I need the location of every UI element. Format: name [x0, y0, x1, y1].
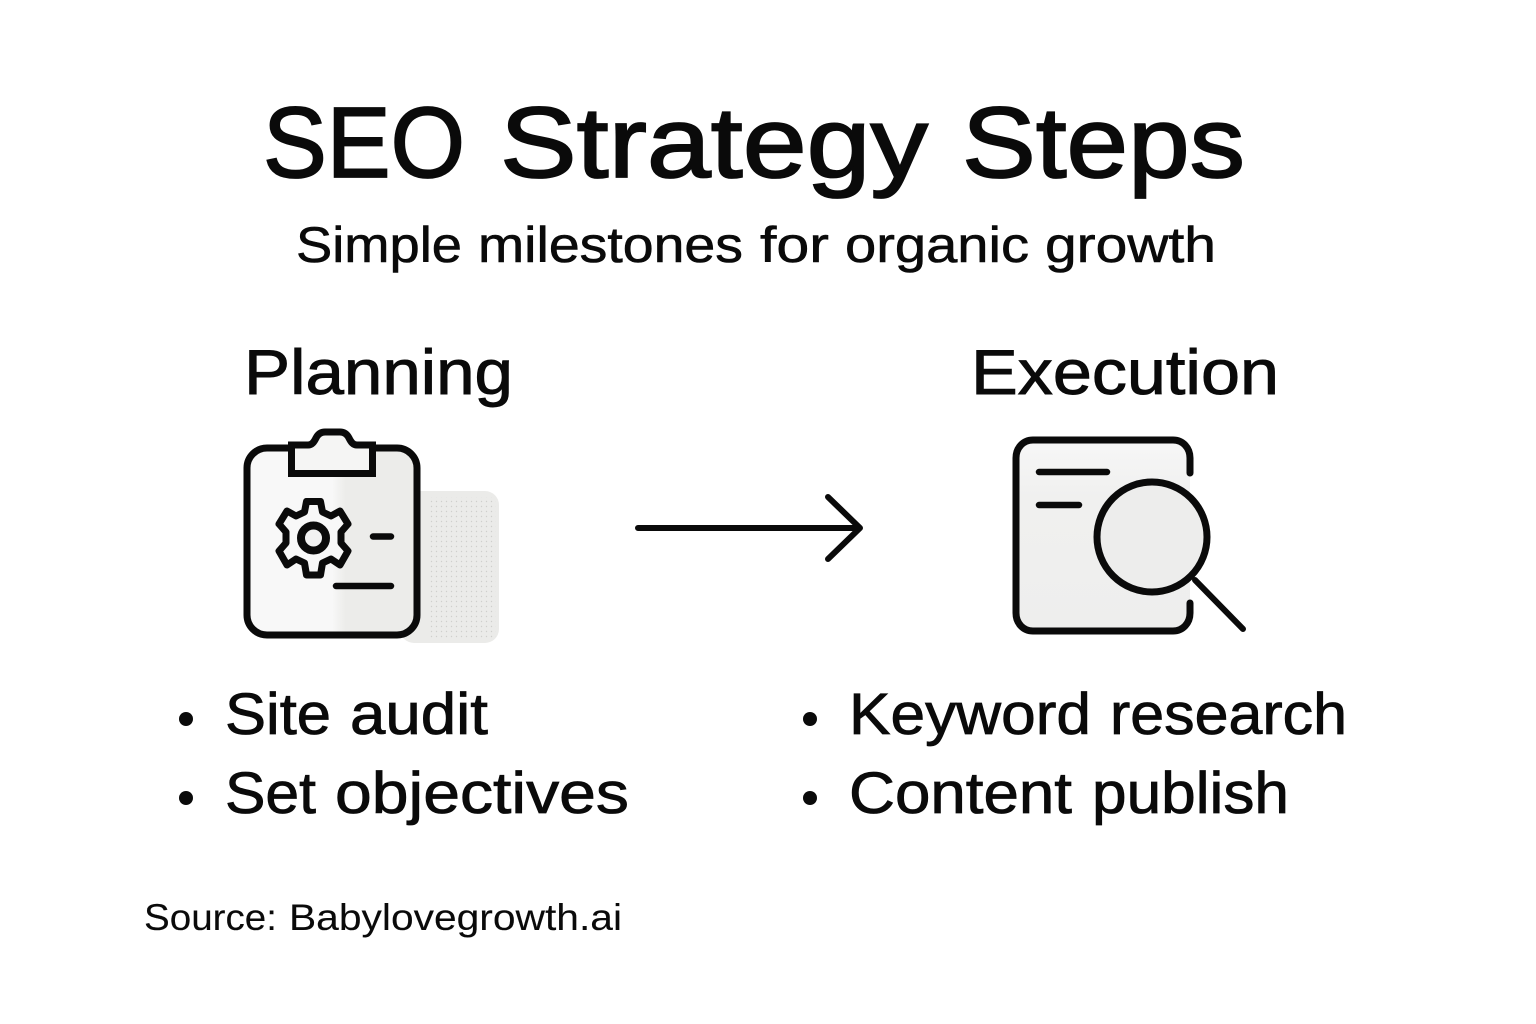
planning bullet list: Set: [225, 761, 316, 826]
title: Steps: [962, 87, 1245, 199]
subtitle: for: [760, 217, 829, 273]
execution heading: Execution: [971, 338, 1279, 408]
planning bullet list: objectives: [335, 761, 629, 826]
planning bullet list: audit: [350, 682, 488, 747]
panel: planning: [179, 338, 629, 826]
icon: clipboard with gear: [247, 432, 499, 643]
subtitle: milestones: [478, 217, 743, 273]
execution bullet list: Keyword: [849, 682, 1091, 747]
planning bullet list: Site: [225, 682, 331, 747]
execution bullet list: Content: [849, 761, 1072, 826]
source note: Babylovegrowth.ai: [289, 897, 622, 938]
title: Strategy: [500, 87, 928, 199]
subtitle: Simple: [296, 217, 462, 273]
subtitle: growth: [1045, 217, 1216, 273]
subtitle: organic: [845, 217, 1029, 273]
planning heading: Planning: [244, 338, 513, 408]
execution bullet list: [803, 682, 1347, 826]
panel: execution: [803, 338, 1347, 826]
arrow: [638, 497, 860, 559]
execution bullet list: research: [1110, 682, 1347, 747]
execution bullet list: publish: [1092, 761, 1289, 826]
icon: document with magnifier: [1016, 440, 1243, 631]
title: SEO: [263, 87, 465, 199]
planning bullet list: [179, 682, 629, 826]
source note: Source:: [144, 897, 277, 938]
